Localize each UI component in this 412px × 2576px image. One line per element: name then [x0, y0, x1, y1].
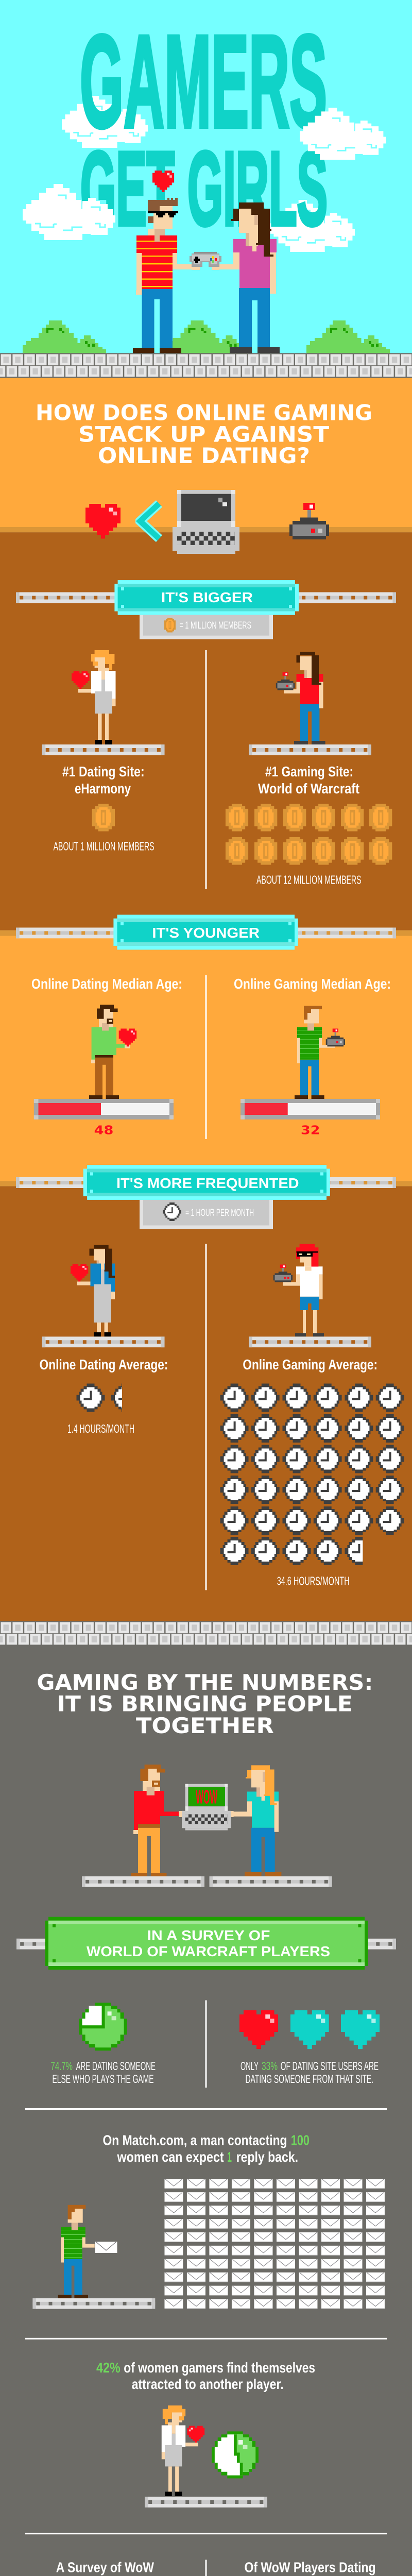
- cloud: left of title: [23, 184, 115, 240]
- banner: it's bigger: IT'S BIGGER: [161, 589, 253, 605]
- text: 74.7 percent dating someone else who plays: [50, 2059, 156, 2086]
- coin grid: 12 million: [226, 804, 392, 865]
- brick divider: [0, 1621, 412, 1646]
- banner: it's bigger: [16, 580, 396, 615]
- character: bearded man in red: [131, 1765, 182, 1876]
- banner: it's more frequented: [16, 1165, 396, 1200]
- legend: coin equals 1 million members: = 1 MILLION MEMBERS: [179, 620, 251, 631]
- banner: in a survey of world of warcraft players: WORLD OF WARCRAFT PLAYERS: [87, 1943, 330, 1959]
- heading: how does online gaming stack up: [36, 400, 372, 468]
- platform: [145, 2497, 267, 2507]
- number: 48: 48: [94, 1124, 113, 1137]
- text: number one gaming site: #1 Gaming Site:: [265, 764, 353, 779]
- platform: [210, 1876, 332, 1887]
- number: 32: 32: [301, 1124, 320, 1137]
- icons: one in three hearts: [239, 2010, 380, 2049]
- progress bar: median age 48: [34, 1099, 174, 1120]
- character: blonde woman with heart, facing right: [162, 2405, 204, 2496]
- divider: bigger columns: [205, 650, 207, 889]
- panel: gaming by the numbers: [0, 1621, 412, 2576]
- banner: in a survey of world of warcraft players: IN A SURVEY OF: [147, 1927, 270, 1943]
- text: number one dating site: #1 Dating Site:: [62, 764, 145, 779]
- text: match.com statistic: 1: [227, 2149, 232, 2165]
- icon: computer showing WoW: WOW: [196, 1787, 217, 1808]
- platform: [249, 744, 371, 755]
- panel: hero sky: [0, 0, 412, 353]
- heading: how does online gaming stack up: STACK UP AGAINST: [78, 421, 330, 447]
- text: 74.7 percent dating someone else who plays: ELSE WHO PLAYS THE GAME: [53, 2072, 153, 2086]
- divider: wow survey columns: [205, 2560, 207, 2576]
- brick divider: [0, 353, 412, 378]
- text: only 33 percent of dating site users: [241, 2059, 379, 2086]
- text: online gaming average: Online Gaming Average:: [243, 1357, 377, 1372]
- icon: heart: [85, 504, 121, 539]
- panel: online gaming vs online dating: [0, 378, 412, 1622]
- character: girl in pink: [212, 202, 280, 353]
- character: long-haired woman in blue blazer with heart: [71, 1245, 115, 1336]
- text: match.com statistic: 100: [291, 2132, 310, 2148]
- text: about 1 million members: ABOUT 1 MILLION MEMBERS: [54, 840, 154, 853]
- icon: game controller: [190, 252, 221, 267]
- icon: less-than arrow: [140, 504, 159, 539]
- text: only 33 percent of dating site users: 33%: [262, 2059, 278, 2073]
- chart: pie 74.7 percent: [79, 2003, 127, 2050]
- clocks: 34.6 hours: [220, 1384, 404, 1565]
- icon: computer: [173, 490, 239, 554]
- coin: 1 million: [92, 804, 115, 832]
- heading: how does online gaming stack up: HOW DOES ONLINE GAMING: [36, 400, 372, 426]
- cloud: behind title right: [270, 200, 355, 252]
- character: dark-haired woman with joystick: [276, 652, 325, 744]
- platform: [42, 1336, 165, 1347]
- character: man in striped green shirt with joystick: [295, 1006, 335, 1099]
- title: [80, 8, 328, 247]
- divider: frequented columns: [205, 1244, 207, 1590]
- platform: [82, 1876, 204, 1887]
- heading: gaming by the numbers: TOGETHER: [136, 1713, 274, 1738]
- icon: envelope in hand: [95, 2242, 117, 2253]
- text: number one gaming site: [258, 764, 359, 796]
- heading: how does online gaming stack up: ONLINE DATING?: [98, 443, 310, 468]
- envelope grid: 100 messages: [164, 2179, 385, 2309]
- character: red-haired woman with glasses and joystick: [273, 1244, 324, 1336]
- character: blonde woman with heart: [72, 650, 115, 744]
- text: match.com statistic: [103, 2132, 310, 2165]
- divider: younger columns: [205, 975, 207, 1139]
- banner: in a survey of world of warcraft players: [16, 1917, 396, 1970]
- platform: [32, 2298, 155, 2309]
- hills: [23, 320, 390, 353]
- text: 42 percent of women gamers: attracted to another player.: [132, 2376, 283, 2392]
- heading: gaming by the numbers: IT IS BRINGING PEOPLE: [57, 1691, 353, 1717]
- text: 74.7 percent dating someone else who plays: ARE DATING SOMEONE: [76, 2059, 156, 2073]
- text: match.com statistic: reply back.: [236, 2149, 298, 2165]
- icon: joystick: [326, 1028, 345, 1046]
- text: match.com statistic: On Match.com, a man contacting: [103, 2132, 287, 2148]
- text: 34.6 hours per month: 34.6 HOURS/MONTH: [277, 1574, 350, 1588]
- legend: coin equals 1 million members: [140, 615, 273, 639]
- heading: gaming by the numbers: GAMING BY THE NUMBERS:: [37, 1670, 373, 1695]
- text: 74.7 percent dating someone else who plays: 74.7%: [50, 2059, 73, 2073]
- text: 42 percent of women gamers: of women gamers find themselves: [124, 2360, 315, 2376]
- platform: [249, 1336, 371, 1347]
- text: online dating median age: Online Dating Median Age:: [31, 976, 182, 992]
- divider: survey columns: [205, 2000, 207, 2088]
- text: match.com statistic: women can expect: [117, 2149, 224, 2165]
- text: number one dating site: [62, 764, 145, 796]
- heading: gaming by the numbers: [37, 1670, 373, 1738]
- text: 42 percent of women gamers: 42%: [96, 2360, 121, 2376]
- text: number one gaming site: World of Warcraft: [258, 781, 359, 796]
- banner: it's more frequented: IT'S MORE FREQUENTED: [116, 1175, 299, 1191]
- text: number one dating site: eHarmony: [75, 781, 131, 796]
- text: a survey of wow players found: A Survey of WoW: [56, 2560, 154, 2575]
- text: of wow players dating one another: Of WoW Players Dating: [244, 2560, 376, 2575]
- character: bearded man with heart: [89, 1005, 136, 1099]
- text: online dating average: Online Dating Average:: [39, 1357, 168, 1372]
- legend: clock equals 1 hour per month: [140, 1200, 273, 1229]
- banner: it's younger: IT'S YOUNGER: [152, 925, 260, 941]
- heart above couple: [152, 171, 174, 192]
- text: 42 percent of women gamers: [96, 2360, 315, 2392]
- text: only 33 percent of dating site users: ONLY: [241, 2059, 259, 2073]
- character: boy with sunglasses: [133, 198, 200, 353]
- clocks: 1.4 hours: [76, 1384, 140, 1412]
- legend: clock equals 1 hour per month: = 1 HOUR PER MONTH: [185, 1207, 254, 1218]
- icon: computer showing WoW: [182, 1784, 231, 1831]
- cloud: behind title left: [62, 96, 148, 148]
- banner: it's younger: [16, 915, 396, 950]
- platform: [42, 744, 165, 755]
- cloud: right of title: [300, 108, 386, 160]
- icon: joystick: [289, 503, 329, 539]
- chart: pie 42 percent: [212, 2431, 259, 2479]
- progress bar: median age 32: [241, 1099, 380, 1120]
- text: 1.4 hours per month: 1.4 HOURS/MONTH: [67, 1422, 134, 1435]
- character: man sending envelope: [58, 2205, 95, 2298]
- character: blonde woman in teal: [231, 1765, 281, 1876]
